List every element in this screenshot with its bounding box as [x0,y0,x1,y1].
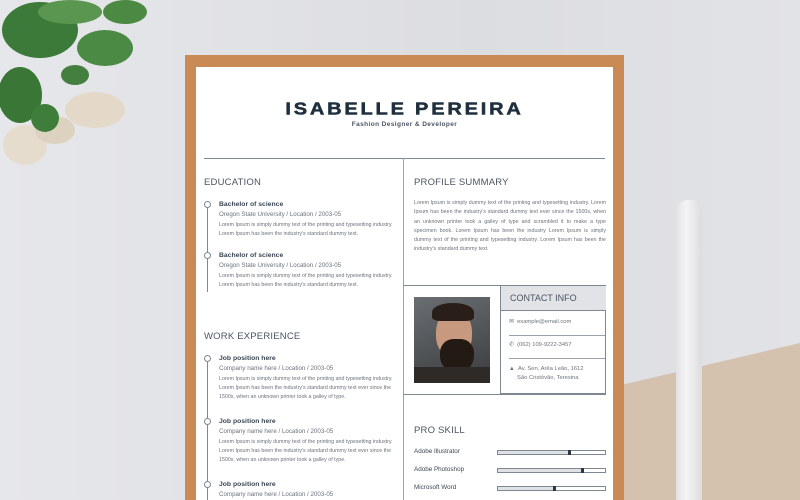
profile text: Lorem Ipsum is simply dummy text of the printing and typesetting industry. Lorem Ipsum has been the industry's standard dummy text ever since the 1500s, when an unknown printer took a galley of type and scrambled it to make a type specimen book. Lorem Ipsum has been the industry Lorem Ipsum is simply dummy text of the printing and typesetting industry. Lorem Ipsum has been the industry's standard dummy text. [414,200,606,252]
address [509,366,584,381]
photo [414,297,490,383]
education timeline: Oregon State University / Location / 2003-05 [219,262,341,269]
work timeline: Job position here [219,418,276,425]
contact header [501,286,606,311]
work timeline: Company name here / Location / 2003-05 [219,365,333,372]
work timeline: Job position here [219,481,276,488]
skills [414,448,606,491]
pole [676,200,702,500]
contact header: CONTACT INFO [510,293,577,303]
skills: Adobe Photoshop [414,466,464,473]
work timeline: Lorem Ipsum is simply dummy text of the printing and typesetting industry. Lorem Ipsum has been the industry's standard dummy text ever since the 1500s, when an unknown printer took a galley of type. [219,376,393,400]
profile summary heading: PROFILE SUMMARY [414,177,509,188]
work timeline [204,355,393,500]
resume frame [185,55,624,500]
email: ✉ example@email.com [509,319,571,325]
pro skill heading: PRO SKILL [414,425,465,436]
phone: ✆ (062) 109-9222-3457 [509,342,572,348]
contact info box [500,286,606,394]
education timeline: Bachelor of science [219,252,283,259]
work timeline: Company name here / Location / 2003-05 [219,428,333,435]
education heading: EDUCATION [204,177,261,188]
education timeline: Lorem Ipsum is simply dummy text of the printing and typesetting industry. Lorem Ipsum has been the industry's standard dummy text. [219,222,393,237]
name title: ISABELLE PEREIRA [285,99,524,119]
work timeline: Company name here / Location / 2003-05 [219,491,333,498]
skills: Microsoft Word [414,484,456,491]
address: ▲ Av. Sen. Arêa Leão, 1612 [509,366,584,372]
paper [196,67,613,500]
work timeline: Lorem Ipsum is simply dummy text of the printing and typesetting industry. Lorem Ipsum has been the industry's standard dummy text ever since the 1500s, when an unknown printer took a galley of type. [219,439,393,463]
education timeline: Oregon State University / Location / 2003-05 [219,211,341,218]
education timeline [204,201,393,292]
plant decoration [0,0,147,165]
subtitle: Fashion Designer & Developer [352,121,457,128]
education timeline: Lorem Ipsum is simply dummy text of the printing and typesetting industry. Lorem Ipsum has been the industry's standard dummy text. [219,273,393,288]
work experience heading: WORK EXPERIENCE [204,331,300,342]
work timeline: Job position here [219,355,276,362]
education timeline: Bachelor of science [219,201,283,208]
address: São Cristóvão, Teresina [517,375,578,381]
skills: Adobe Illustrator [414,448,460,455]
